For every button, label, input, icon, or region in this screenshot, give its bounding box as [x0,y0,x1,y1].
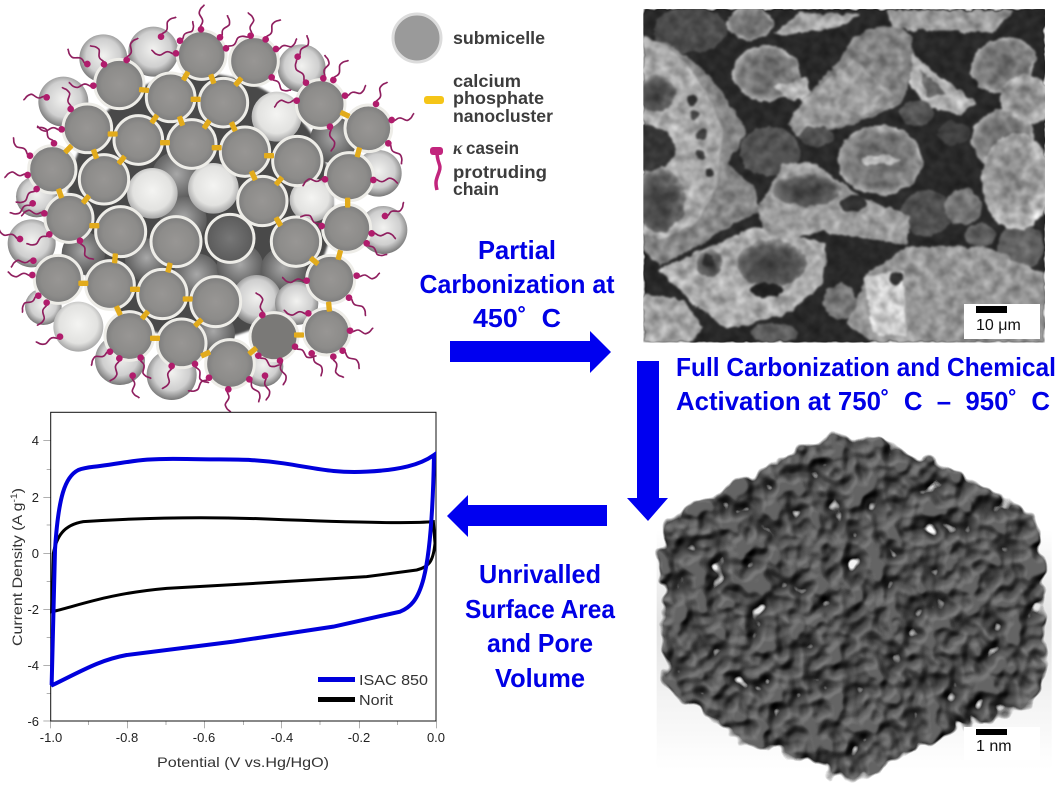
legend: submicelle icon [393,14,441,62]
background spheres [8,27,407,400]
legend: casein label: chain [453,179,499,199]
step 1 label: 450˚ C [473,303,561,333]
foam scale bar [964,727,1040,760]
y-axis labels: 4 [32,433,39,448]
step 3 label: Unrivalled [479,559,601,589]
Norit curve [52,518,435,612]
chart legend: ISAC 850 [359,672,428,689]
plot frame [51,412,436,721]
legend: casein label: casein [466,138,519,158]
legend [393,14,553,199]
SEM scale bar [964,304,1040,339]
ISAC 850 curve [52,455,434,685]
soft shadow backdrop [657,530,1052,770]
x-axis labels [40,730,445,745]
y-axis title: Current Density (A g [9,520,25,646]
foam scale bar: 1 nm [976,738,1012,755]
y-axis title: -1 [9,493,19,502]
submicelles [29,31,392,388]
legend: nanocluster label: calcium [453,71,521,91]
legend: nanocluster icon [424,96,444,104]
legend: casein label: protruding [453,162,547,182]
calcium phosphate nanoclusters [56,70,362,359]
step 3 label: and Pore [487,628,593,658]
SEM scale bar: 10 μm [976,317,1021,334]
arrow: down [627,361,668,521]
legend: nanocluster label: nanocluster [453,106,553,126]
legend: casein chain icon [430,147,443,190]
x-axis labels: 0.0 [427,730,445,745]
legend: submicelle label: submicelle [453,28,545,48]
porous carbon 3D structure [657,433,1052,785]
axis ticks [43,441,436,728]
legend: casein label: κ [453,138,463,158]
step 3 label: Volume [495,663,585,693]
x-axis title: Potential (V vs.Hg/HgO) [157,754,329,770]
step 2 label: Activation at 750˚ C – 950˚ C [676,386,1050,416]
casein micelle illustration [0,5,415,413]
x-axis labels: -0.4 [271,730,293,745]
x-axis labels: -0.6 [193,730,215,745]
y-axis title: ) [9,488,25,493]
arrow: left [447,495,607,537]
CV chart [9,412,445,770]
x-axis labels: -1.0 [40,730,62,745]
step 1 label: Carbonization at [420,269,615,299]
step 1 label: Partial [478,235,556,265]
dark core behind spheres [67,73,333,340]
SEM particles [615,7,1053,343]
SEM micrograph [615,7,1053,343]
y-axis labels: -4 [27,658,39,673]
foam body [657,433,1047,785]
x-axis labels: -0.2 [348,730,370,745]
chart legend [318,672,428,709]
chart legend: Norit [359,692,394,709]
x-axis labels: -0.8 [116,730,138,745]
y-axis labels: 2 [32,490,39,505]
step 3 label: Surface Area [465,594,616,624]
y-axis labels [27,433,39,729]
y-axis labels: -2 [27,602,39,617]
arrow: right [450,331,611,373]
legend: nanocluster label: phosphate [453,88,544,108]
y-axis labels: 0 [32,546,39,561]
kappa casein chains [0,5,415,413]
y-axis labels: -6 [27,714,39,729]
